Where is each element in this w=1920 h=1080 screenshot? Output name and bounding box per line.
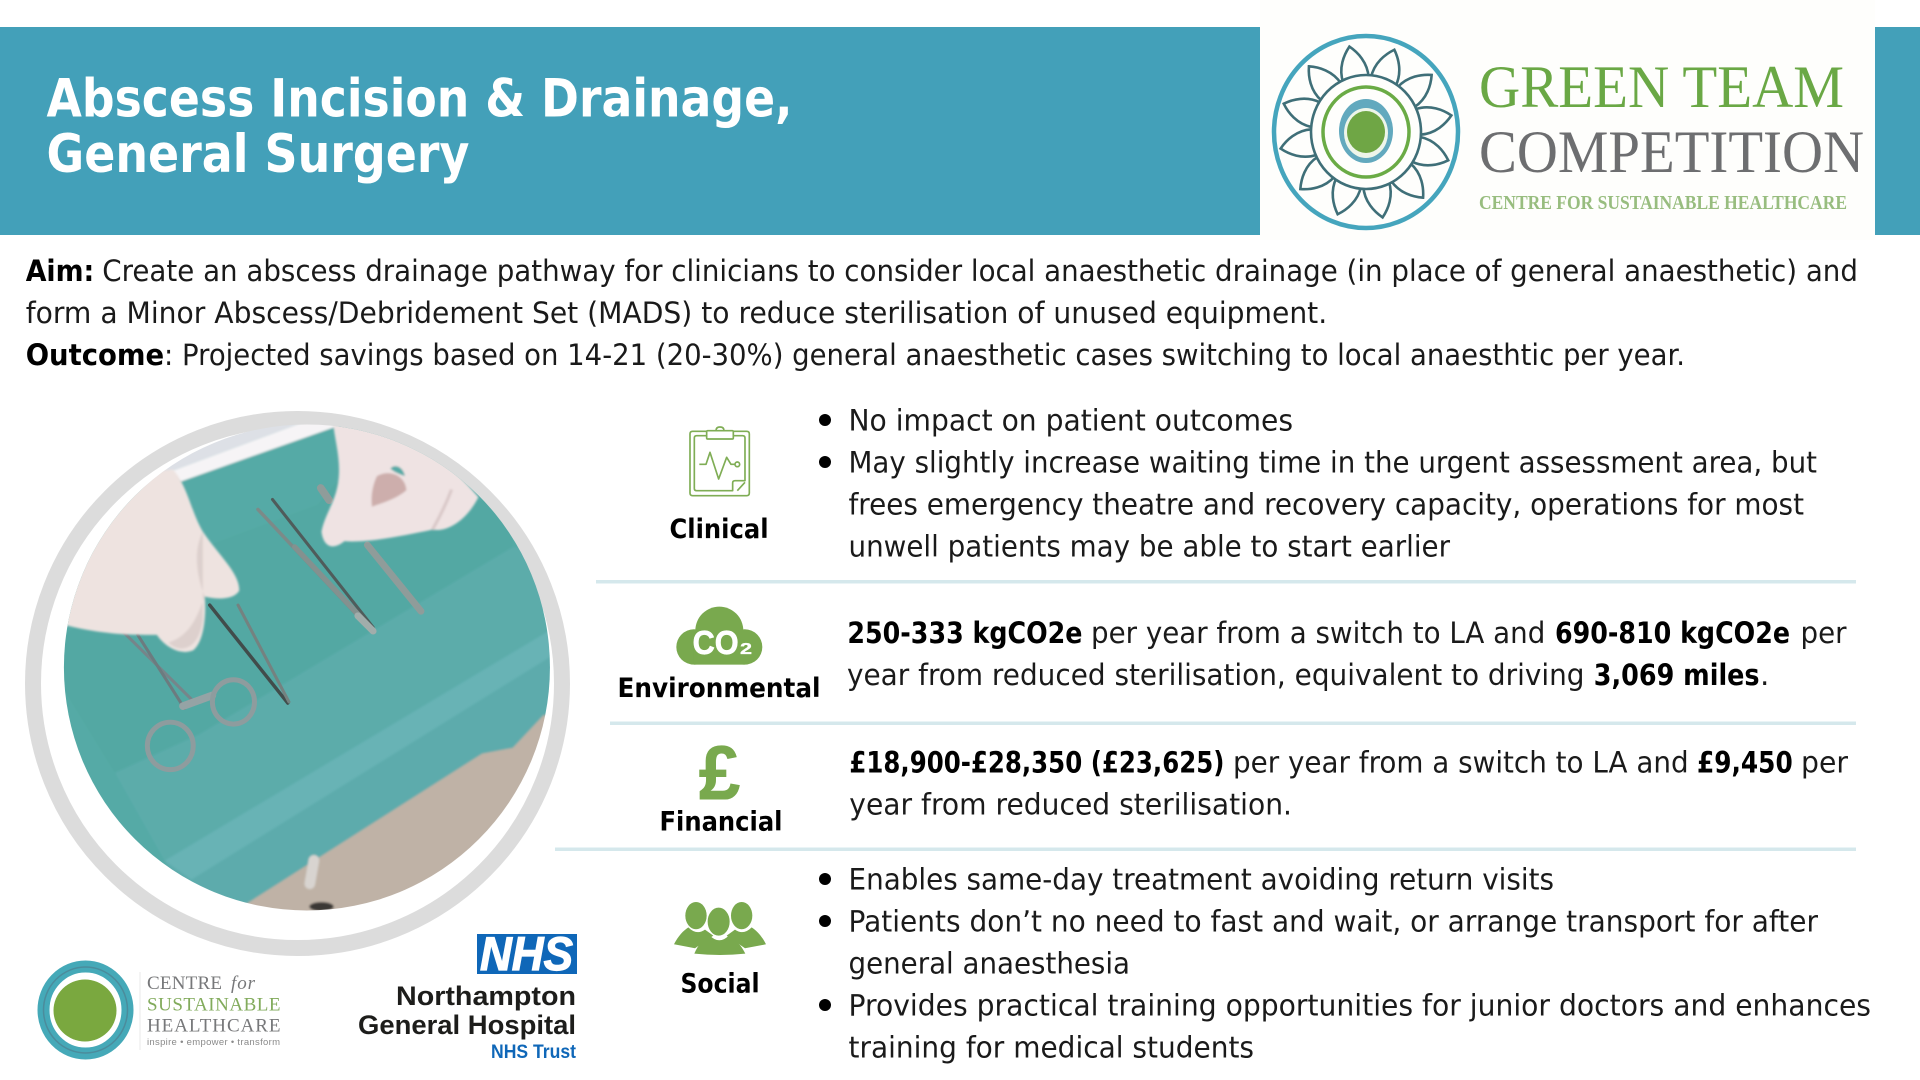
logo text: GREEN TEAM [1479, 54, 1844, 120]
environmental text: 3,069 miles [1594, 658, 1760, 692]
logo text: SUSTAINABLE [147, 995, 280, 1016]
social bullets: Enables same-day treatment avoiding return visits [848, 862, 1554, 896]
logo text: CENTRE [147, 973, 222, 994]
financial text: £18,900-£28,350 (£23,625) [849, 746, 1224, 780]
row: financial [660, 731, 1849, 838]
logo text: inspire • empower • transform [147, 1037, 280, 1048]
logo: NHS Northampton General Hospital: General Hospital [358, 1010, 576, 1040]
gloved hands [46, 423, 478, 652]
social bullets: Provides practical training opportunities for junior doctors and enhances [848, 988, 1871, 1022]
row: environmental: Environmental [618, 673, 820, 704]
environmental text: 690-810 kgCO2e [1555, 616, 1790, 650]
social bullets [819, 862, 1871, 1064]
icon: NHS lozenge: NHS [480, 927, 573, 980]
title [46, 68, 792, 185]
environmental text [847, 616, 1847, 692]
row: social [674, 862, 1871, 1064]
financial text: £9,450 [1697, 746, 1793, 780]
clinical bullets: frees emergency theatre and recovery capacity, operations for most [848, 487, 1804, 521]
aim and outcome text: Aim: [26, 254, 94, 288]
row: clinical: Clinical [670, 514, 768, 545]
row: financial: Financial [660, 806, 782, 838]
forceps and rod [123, 488, 421, 770]
logo text: COMPETITION [1479, 119, 1864, 185]
logo text: for [231, 973, 256, 994]
logo: Green Team Competition [1274, 36, 1864, 228]
logo: NHS Northampton General Hospital: NHS Trust [491, 1042, 577, 1063]
aim and outcome text: Outcome [26, 338, 164, 372]
title: Abscess Incision & Drainage, [46, 68, 792, 130]
icon: sunflower emblem [1274, 36, 1458, 228]
logo: Centre for Sustainable Healthcare [44, 966, 280, 1054]
icon: CO2 cloud: CO [693, 625, 739, 662]
logo text: CENTRE FOR SUSTAINABLE HEALTHCARE [1479, 192, 1847, 214]
aim and outcome text [26, 254, 1858, 372]
financial text: per [1801, 746, 1849, 780]
financial text: year from reduced sterilisation. [849, 788, 1292, 822]
row: clinical [670, 403, 1817, 563]
social bullets: general anaesthesia [848, 946, 1130, 980]
aim and outcome text: : Projected savings based on 14-21 (20-30%) general anaesthetic cases switching to local anaesthtic per year. [164, 338, 1685, 372]
header banner [0, 0, 1920, 240]
clinical bullets: No impact on patient outcomes [848, 403, 1293, 437]
environmental text: year from reduced sterilisation, equivalent to driving [847, 658, 1584, 692]
icon: CO2 cloud: 2 [740, 641, 752, 658]
photo: surgical instruments on drape in grey ring [33, 419, 562, 948]
icon: green circle with teal ring [44, 966, 128, 1054]
financial text: per year from a switch to LA and [1233, 746, 1689, 780]
logo text [1479, 54, 1864, 214]
social bullets: Patients don’t no need to fast and wait, or arrange transport for after [848, 904, 1819, 938]
logo: NHS Northampton General Hospital [358, 927, 577, 1063]
social bullets: training for medical students [848, 1030, 1254, 1064]
financial text [849, 746, 1849, 822]
logo: NHS Northampton General Hospital: Northampton [396, 981, 576, 1011]
aim and outcome text: Create an abscess drainage pathway for clinicians to consider local anaesthetic drainage (in place of general anaesthetic) and [102, 254, 1858, 288]
row: environmental [618, 607, 1847, 704]
title: General Surgery [46, 124, 470, 185]
icon: pound sign: £ [699, 731, 740, 816]
environmental text: . [1760, 658, 1769, 692]
clinical bullets: unwell patients may be able to start earlier [848, 529, 1451, 563]
icon: clipboard with pulse [690, 427, 749, 496]
aim and outcome text: form a Minor Abscess/Debridement Set (MADS) to reduce sterilisation of unused equipment. [26, 296, 1327, 330]
icon: CO2 cloud [676, 607, 762, 665]
icon: group of people [674, 902, 766, 955]
logo text [147, 973, 280, 1048]
row: social: Social [680, 968, 760, 1000]
clinical bullets [819, 403, 1817, 563]
logo text: HEALTHCARE [147, 1016, 280, 1037]
environmental text: 250-333 kgCO2e [847, 616, 1082, 650]
environmental text: per year from a switch to LA and [1091, 616, 1545, 650]
clinical bullets: May slightly increase waiting time in the urgent assessment area, but [848, 445, 1817, 479]
environmental text: per [1800, 616, 1847, 650]
